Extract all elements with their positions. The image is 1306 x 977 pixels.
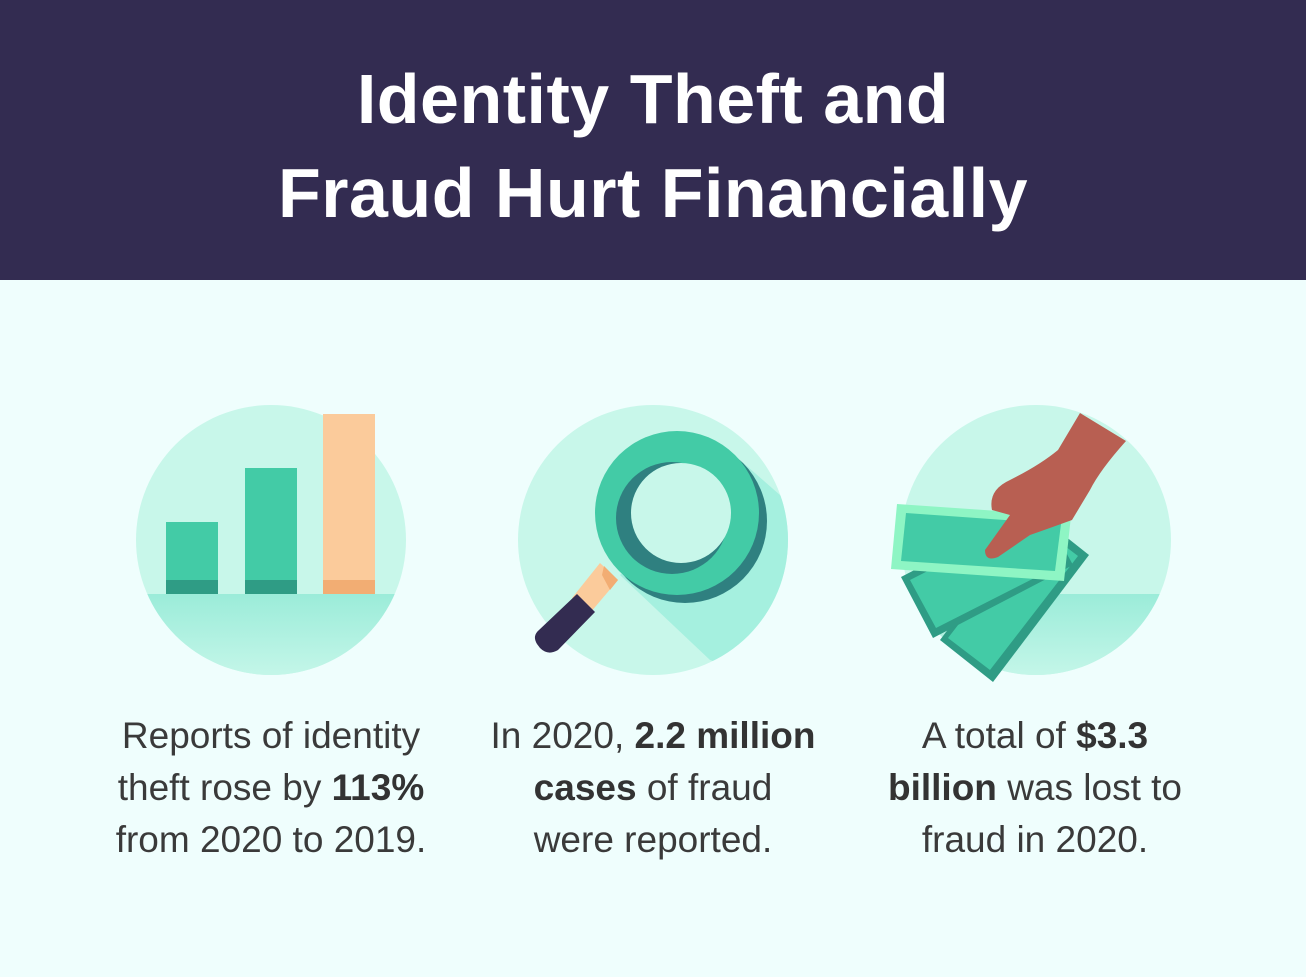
text: identity theft stat	[116, 715, 426, 860]
icon: magnifying glass	[518, 405, 788, 675]
text: identity theft stat: theft rose by 113%	[118, 767, 424, 808]
icon: bar chart	[130, 405, 420, 684]
text: identity theft stat: from 2020 to 2019.	[116, 819, 426, 860]
text: money lost stat	[888, 715, 1182, 860]
text: money lost stat: fraud in 2020.	[922, 819, 1148, 860]
header banner	[0, 0, 1306, 280]
text: money lost stat: A total of $3.3	[922, 715, 1148, 756]
icons	[136, 405, 1171, 682]
text: fraud cases stat: were reported.	[534, 819, 772, 860]
title	[278, 60, 1028, 232]
text: identity theft stat: Reports of identity	[122, 715, 420, 756]
title: Fraud Hurt Financially	[278, 154, 1028, 232]
text: fraud cases stat	[491, 715, 815, 860]
text: money lost stat: billion was lost to	[888, 767, 1182, 808]
title: Identity Theft and	[357, 60, 949, 138]
icon: hand with money	[891, 405, 1185, 684]
text: fraud cases stat: In 2020, 2.2 million	[491, 715, 815, 756]
text: fraud cases stat: cases of fraud	[534, 767, 772, 808]
